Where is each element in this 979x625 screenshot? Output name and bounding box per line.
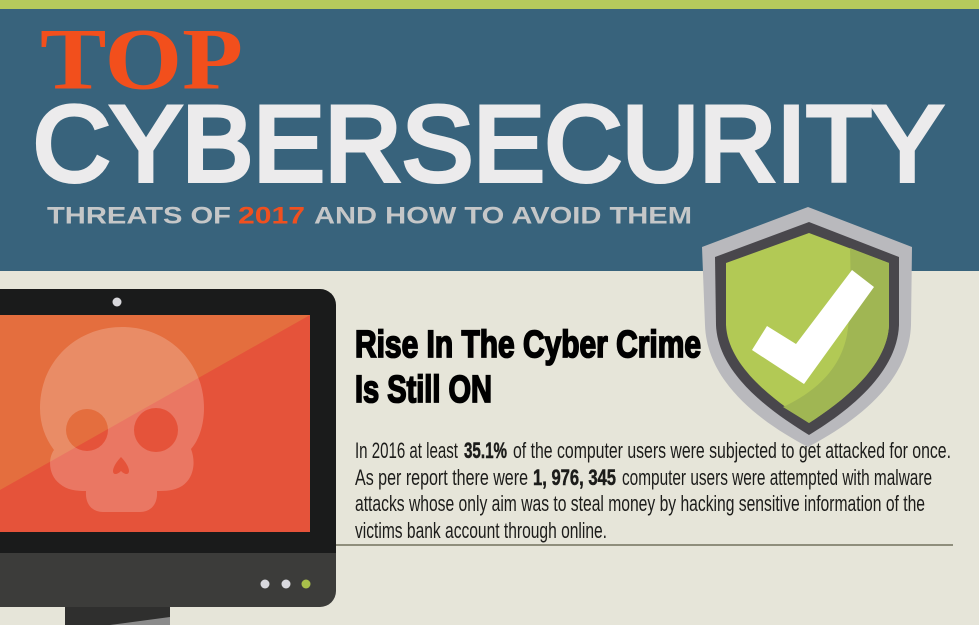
header banner (0, 9, 979, 271)
divider rule (336, 544, 953, 546)
title: TOP: TOP (40, 12, 243, 108)
body paragraph: As per report there were (355, 465, 528, 490)
heading: Rise In The Cyber Crime (355, 324, 701, 366)
subtitle (47, 202, 692, 230)
title: CYBERSECURITY: CYBERSECURITY (33, 84, 943, 204)
status lights (260, 580, 310, 588)
webcam (112, 298, 122, 306)
icon: security shield with check mark (702, 207, 912, 447)
screen (0, 315, 310, 532)
monitor chin (0, 553, 336, 607)
skull (40, 327, 204, 512)
monitor body (0, 289, 336, 553)
heading: Is Still ON (355, 369, 492, 411)
body paragraph: In 2016 at least (355, 438, 458, 463)
monitor stand (65, 600, 170, 625)
icon: computer monitor with skull (0, 289, 336, 625)
body paragraph: 35.1% (464, 438, 507, 463)
top green bar (0, 0, 979, 9)
body paragraph: 1, 976, 345 (533, 465, 616, 490)
subtitle: 2017 (238, 202, 305, 230)
body paragraph: victims bank account through online. (355, 518, 607, 543)
heading (355, 324, 701, 411)
subtitle: THREATS OF (47, 202, 231, 230)
subtitle: AND HOW TO AVOID THEM (314, 202, 692, 230)
body paragraph (355, 438, 951, 543)
